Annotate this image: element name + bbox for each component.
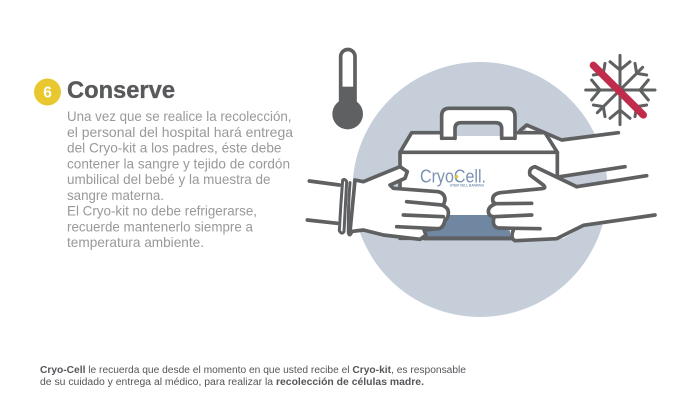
heading: Conserve: Conserve bbox=[67, 77, 175, 104]
step badge: 6: 6 bbox=[43, 84, 52, 102]
step badge: 6 bbox=[34, 78, 61, 106]
logo: CryoCell: STEM CELL BANKING bbox=[450, 184, 484, 188]
body text: del Cryo-kit a los padres, éste debe bbox=[67, 140, 282, 156]
body text: recuerde mantenerlo siempre a bbox=[67, 219, 253, 234]
logo: CryoCell: CryoCell. bbox=[420, 166, 486, 187]
kit handle bbox=[442, 108, 515, 138]
right arm sleeve behind kit bbox=[520, 125, 625, 177]
kit body bbox=[400, 152, 557, 238]
footer note: de su cuidado y entrega al médico, para realizar la recolección de células madre. bbox=[40, 377, 424, 388]
left gloved hand bbox=[307, 167, 448, 239]
body text: el personal del hospital hará entrega bbox=[67, 125, 293, 140]
footer note bbox=[40, 365, 466, 388]
kit lid bbox=[400, 133, 557, 152]
right hand bbox=[488, 167, 655, 241]
body text: sangre materna. bbox=[67, 188, 164, 203]
body text: El Cryo-kit no debe refrigerarse, bbox=[67, 204, 257, 218]
kit lower band bbox=[427, 215, 510, 238]
cooler kit bbox=[400, 108, 557, 238]
background circle bbox=[352, 62, 608, 317]
icon: crossed-out snowflake bbox=[586, 55, 655, 125]
artwork drawn in 3x coordinates bbox=[307, 49, 655, 241]
body text: contener la sangre y tejido de cordón bbox=[67, 156, 290, 171]
body text: Una vez que se realice la recolección, bbox=[67, 109, 292, 124]
body text bbox=[67, 109, 293, 250]
footer note: Cryo-Cell le recuerda que desde el momento en que usted recibe el Cryo-kit, es responsable bbox=[40, 365, 466, 376]
icon: thermometer bbox=[332, 49, 363, 129]
body text: temperatura ambiente. bbox=[67, 235, 204, 250]
illustration bbox=[307, 49, 655, 317]
body text: umbilical del bebé y la muestra de bbox=[67, 172, 270, 187]
